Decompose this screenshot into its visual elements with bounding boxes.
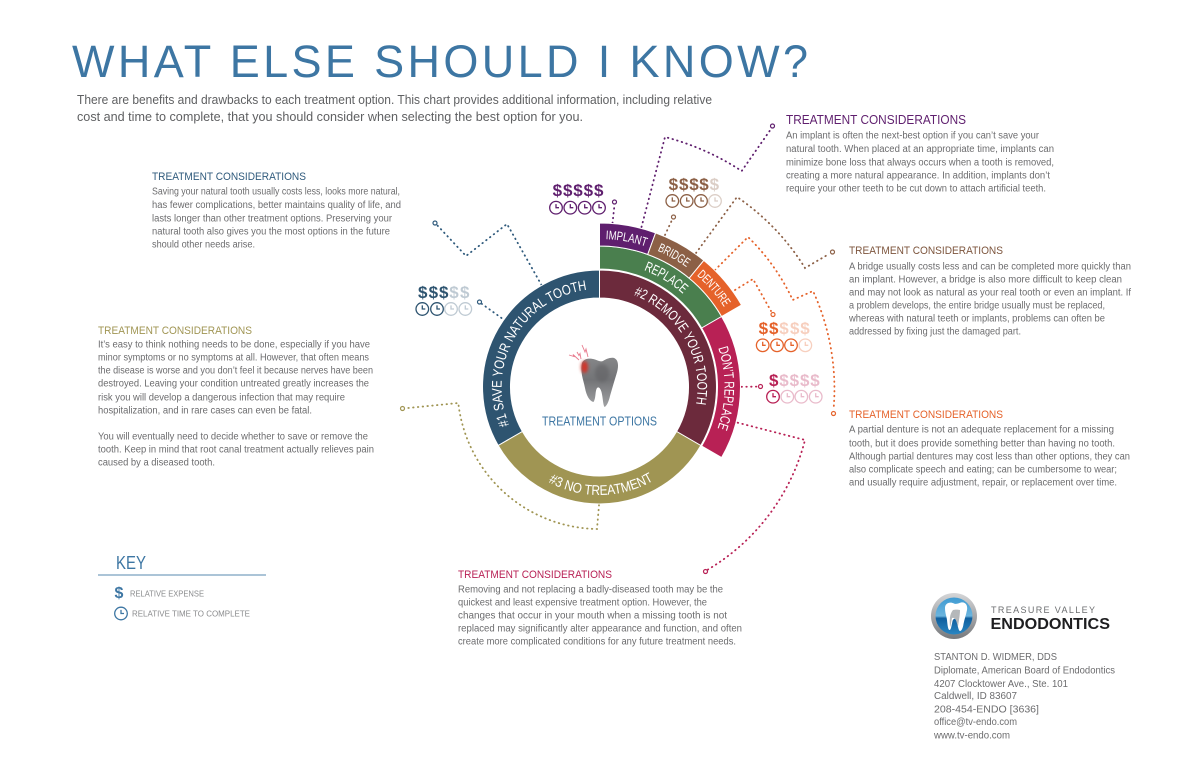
cost and time rating: denture: $ <box>759 319 769 338</box>
panel: implant considerations: TREATMENT CONSIDERATIONS <box>786 113 966 127</box>
cost and time rating: save your natural tooth: $ <box>439 283 449 302</box>
panel: save your natural tooth considerations: TREATMENT CONSIDERATIONS <box>152 171 306 183</box>
panel: denture considerations: Although partial dentures may cost less than other options, they can <box>849 452 1130 462</box>
contact details: Diplomate, American Board of Endodontics <box>934 666 1115 676</box>
cost and time rating: don't replace: $ <box>769 371 779 390</box>
logo: treasure valley endodontics: TREASURE VALLEY <box>991 605 1095 615</box>
panel: save your natural tooth considerations: natural tooth also gives you the most options in the future <box>152 226 390 238</box>
segment: don't replace <box>702 316 740 458</box>
ring labels: BRIDGE <box>658 243 691 267</box>
panel: no treatment considerations: the disease is worse and you don’t feel it because nerves have been <box>98 366 373 376</box>
key item: expense <box>115 585 204 602</box>
contact details <box>933 652 1115 742</box>
connector: denture <box>715 237 836 416</box>
panel: save your natural tooth considerations: Saving your natural tooth usually costs less, looks more natural, <box>152 186 400 198</box>
cost and time rating: implant: $ <box>594 181 604 200</box>
logo: treasure valley endodontics <box>931 593 1110 639</box>
panel: no treatment considerations: tooth. Keep in mind that root canal treatment actually relieves pain <box>98 444 374 456</box>
panel: bridge considerations: TREATMENT CONSIDERATIONS <box>849 245 1003 257</box>
cost and time rating: implant: $ <box>553 181 563 200</box>
panel: bridge considerations: addressed by fixing just the damaged part. <box>849 326 1021 338</box>
panel: denture considerations: tooth, but it does provide something better than having no tooth. <box>849 438 1115 450</box>
panel: save your natural tooth considerations <box>152 171 401 250</box>
segment: no treatment <box>498 432 701 504</box>
contact details: STANTON D. WIDMER, DDS <box>934 652 1057 663</box>
connector: bridge <box>665 197 834 268</box>
panel: don't replace considerations: TREATMENT CONSIDERATIONS <box>458 569 612 581</box>
segment: replace <box>600 246 722 328</box>
logo: treasure valley endodontics: ENDODONTICS <box>990 616 1110 633</box>
connector: don't replace <box>704 384 805 574</box>
donut chart: treatment options <box>483 223 741 504</box>
cost and time rating: save your natural tooth <box>416 283 472 315</box>
panel: don't replace considerations: create more complicated conditions for any future treatment needs. <box>458 636 736 648</box>
cost and time rating: implant: $ <box>573 181 583 200</box>
cost and time rating: save your natural tooth: $ <box>460 283 470 302</box>
cost and time rating: bridge: $ <box>689 175 699 194</box>
cost and time rating: denture: $ <box>769 319 779 338</box>
contact details: www.tv-endo.com <box>933 730 1010 742</box>
cost and time rating: bridge: $ <box>679 175 689 194</box>
connector: save your natural tooth <box>433 221 542 318</box>
panel: denture considerations <box>849 409 1130 488</box>
ring labels: DON’T REPLACE <box>718 346 734 431</box>
panel: don't replace considerations: replaced may significantly alter appearance and function, and often <box>458 624 742 634</box>
segment: bridge <box>648 233 704 278</box>
panel: don't replace considerations: Removing and not replacing a badly-diseased tooth may be the <box>458 584 723 596</box>
key item: expense: $ <box>115 585 124 602</box>
cost and time rating: don't replace: $ <box>779 371 789 390</box>
cost and time rating: don't replace: $ <box>810 371 820 390</box>
ring labels <box>492 230 734 495</box>
panel: implant considerations: minimize bone loss that always occurs when a tooth is removed, <box>786 158 1054 168</box>
cost and time rating: save your natural tooth: $ <box>429 283 439 302</box>
key <box>98 553 266 620</box>
panel: bridge considerations: an implant. However, a bridge is also more difficult to keep clean <box>849 274 1122 286</box>
panel: implant considerations <box>786 113 1054 194</box>
panel: implant considerations: natural tooth. When placed at an appropriate time, implants can <box>786 144 1054 155</box>
panel: implant considerations: An implant is often the next-best option if you can’t save your <box>786 130 1040 142</box>
panel: bridge considerations <box>848 245 1131 338</box>
panel: no treatment considerations: TREATMENT CONSIDERATIONS <box>98 325 252 337</box>
key item: time: RELATIVE TIME TO COMPLETE <box>132 608 250 618</box>
panel: implant considerations: creating a more natural appearance. In addition, implants don’t <box>786 170 1050 182</box>
ring labels: #1 SAVE YOUR NATURAL TOOTH <box>492 280 586 428</box>
contact details: 4207 Clocktower Ave., Ste. 101 <box>934 679 1068 690</box>
panel: bridge considerations: a problem develops, the entire bridge usually must be replaced, <box>849 300 1105 312</box>
contact details: 208-454-ENDO [3636] <box>934 704 1039 716</box>
cost and time rating: don't replace <box>767 371 822 403</box>
ring labels: IMPLANT <box>606 230 648 246</box>
cost and time rating: denture: $ <box>790 319 800 338</box>
cost and time rating: denture: $ <box>800 319 810 338</box>
panel: denture considerations: and usually require adjustment, repair, or replacement over time. <box>849 478 1117 488</box>
title: WHAT ELSE SHOULD I KNOW? <box>72 36 808 87</box>
panel: save your natural tooth considerations: lasts longer than other treatment options. Preserving your <box>152 214 393 224</box>
cost and time rating: don't replace: $ <box>800 371 810 390</box>
panel: implant considerations: require your other teeth to be cut down to attach artificial teeth. <box>786 184 1046 194</box>
panel: no treatment considerations: It’s easy to think nothing needs to be done, especially if you have <box>98 340 370 350</box>
ring labels: REPLACE <box>644 262 689 294</box>
segment: denture <box>689 260 742 316</box>
cost and time rating: don't replace: $ <box>790 371 800 390</box>
connector: no treatment <box>400 403 599 529</box>
cost and time rating: bridge: $ <box>669 175 679 194</box>
cost and time rating: implant: $ <box>563 181 573 200</box>
ring labels: #3 NO TREATMENT <box>549 472 651 495</box>
key item: time <box>115 607 250 620</box>
cost and time rating: implant <box>550 181 605 214</box>
panel: don't replace considerations: changes that occur in your mouth when a missing tooth is not <box>458 610 727 622</box>
panel: denture considerations: also complicate speech and eating; can be cumbersome to wear; <box>849 464 1117 476</box>
segment: remove your tooth <box>600 270 716 446</box>
cost and time rating: bridge: $ <box>699 175 709 194</box>
intro text <box>77 93 712 124</box>
cost and time rating: bridge: $ <box>710 175 720 194</box>
panel: bridge considerations: whereas with natural teeth or implants, problems can often be <box>848 314 1105 324</box>
contact details: office@tv-endo.com <box>934 717 1017 728</box>
key: KEY <box>116 553 146 573</box>
cost and time rating: implant: $ <box>584 181 594 200</box>
panel: no treatment considerations <box>98 325 374 468</box>
ring labels: #2 REMOVE YOUR TOOTH <box>634 287 708 405</box>
segment: implant <box>600 223 656 254</box>
panel: don't replace considerations: quickest and least expensive treatment option. However, the <box>458 598 707 608</box>
cost and time rating: save your natural tooth: $ <box>418 283 428 302</box>
panel: save your natural tooth considerations: should other needs arise. <box>152 240 255 250</box>
connector: implant <box>612 124 774 227</box>
icon: tooth with pain <box>569 345 618 407</box>
cost and time rating: denture <box>756 319 812 352</box>
panel: no treatment considerations: You will eventually need to decide whether to save or remove the <box>98 432 368 442</box>
intro text: cost and time to complete, that you should consider when selecting the best option for you. <box>77 110 583 124</box>
panel: no treatment considerations: destroyed. Leaving your condition untreated greatly increases the <box>98 378 369 390</box>
panel: bridge considerations: and may not look as natural as your real tooth or even an implant. If <box>849 288 1131 298</box>
intro text: There are benefits and drawbacks to each treatment option. This chart provides additional information, including relative <box>77 93 712 107</box>
panel: no treatment considerations: hospitalization, and in rare cases can even be fatal. <box>98 406 312 416</box>
panel: no treatment considerations: risk you will develop a dangerous infection that may require <box>98 392 345 404</box>
panel: no treatment considerations: caused by a diseased tooth. <box>98 458 215 468</box>
cost and time rating: bridge <box>666 175 721 207</box>
panel: bridge considerations: A bridge usually costs less and can be completed more quickly than <box>849 262 1131 272</box>
panel: no treatment considerations: minor symptoms or no symptoms at all. However, that often means <box>98 352 369 364</box>
panel: save your natural tooth considerations: has fewer complications, better maintains quality of life, and <box>152 200 401 211</box>
cost and time rating: save your natural tooth: $ <box>449 283 459 302</box>
cost and time rating: denture: $ <box>779 319 789 338</box>
contact details: Caldwell, ID 83607 <box>934 691 1017 702</box>
key item: expense: RELATIVE EXPENSE <box>130 588 204 598</box>
panel: denture considerations: A partial denture is not an adequate replacement for a missing <box>849 424 1114 436</box>
center label: TREATMENT OPTIONS <box>542 414 657 428</box>
segment: save your natural tooth <box>483 270 600 446</box>
panel: don't replace considerations <box>458 569 742 648</box>
ring labels: DENTURE <box>697 270 731 307</box>
panel: denture considerations: TREATMENT CONSIDERATIONS <box>849 409 1003 421</box>
